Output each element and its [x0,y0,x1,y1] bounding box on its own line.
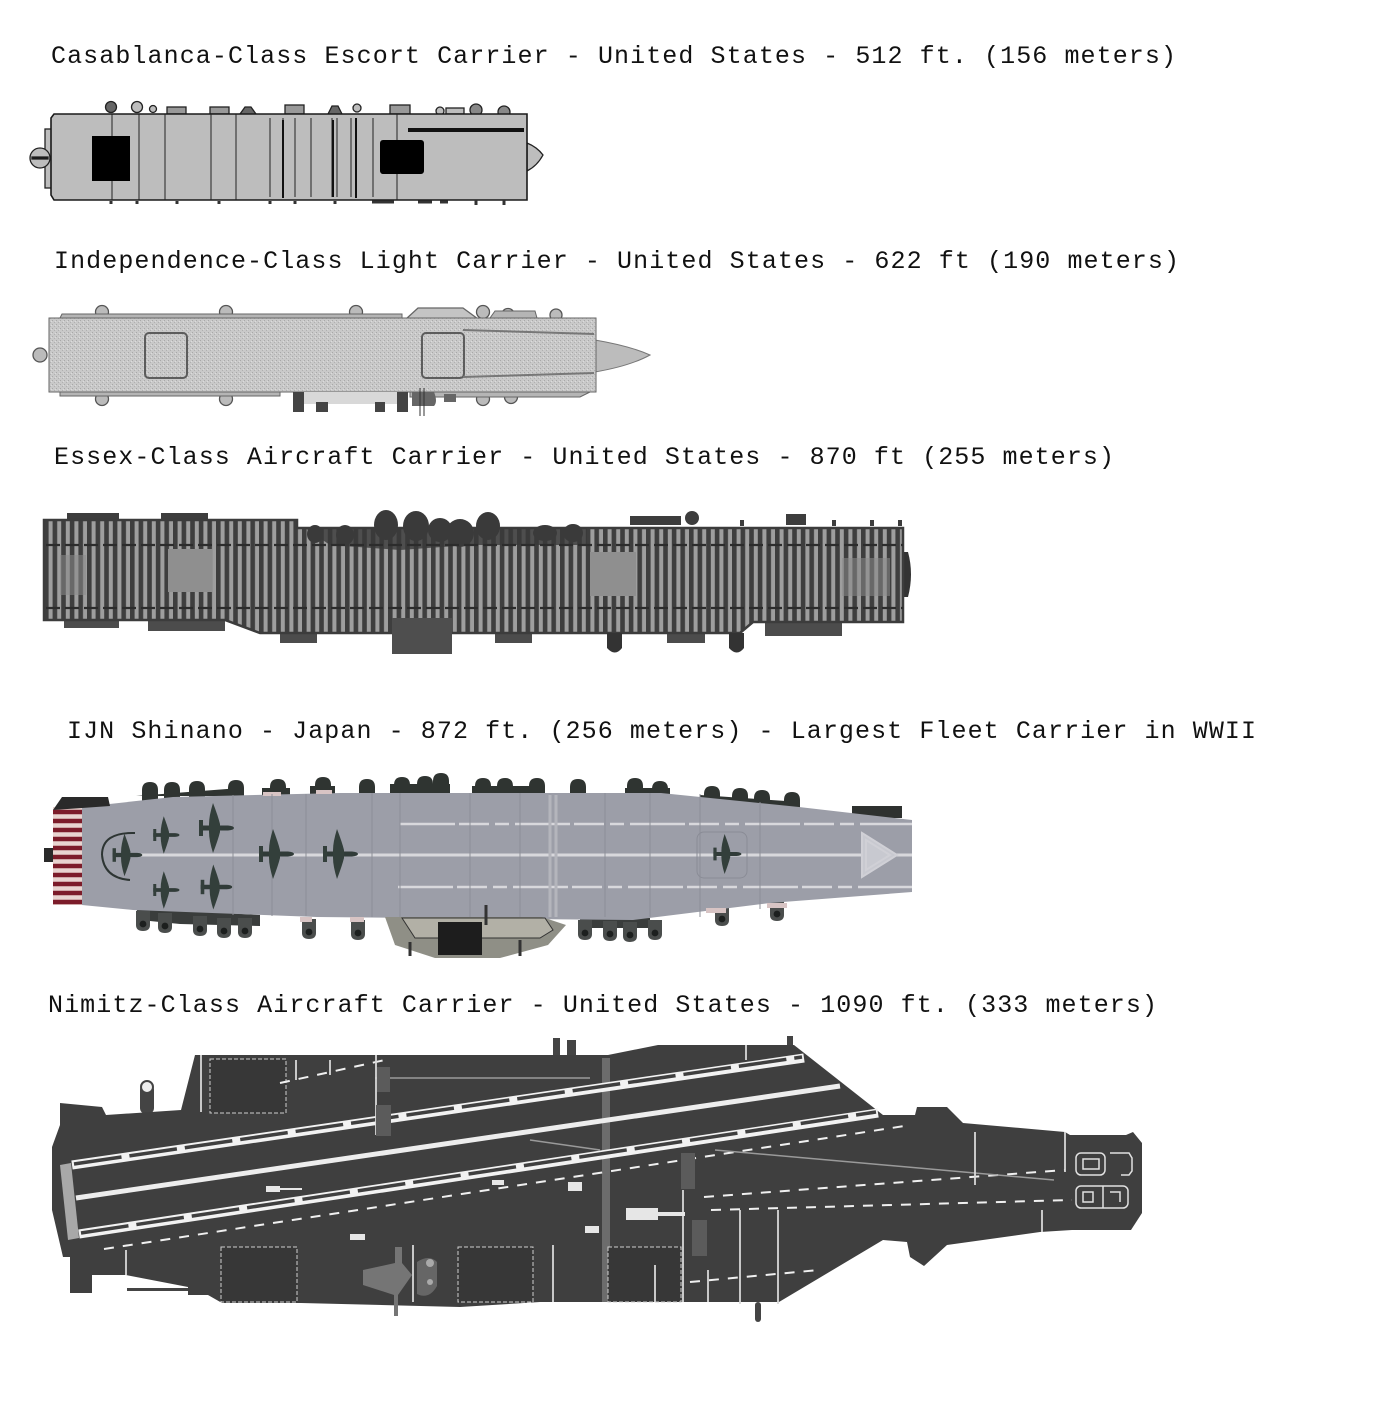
flight deck [49,318,596,392]
thin guide lines [375,1078,1054,1180]
deck parked equipment [266,1180,685,1240]
title: Casablanca-Class: Casablanca-Class Escort Carrier - United States - 512 ft. (156 meters) [51,42,1176,71]
bottom sponsons [64,620,842,643]
ship: IJN Shinano [44,773,912,958]
end deck markings [60,555,890,596]
island [385,905,566,958]
elevator: aft [92,136,130,181]
top elevators [210,1059,286,1113]
ship: Independence-Class light carrier [33,306,650,416]
lower edge fittings [111,200,504,205]
deck markings [130,854,912,856]
gun tubs [33,306,562,406]
fore elevator stacks [376,1067,707,1256]
catwalks [60,311,590,397]
flight deck [82,793,912,920]
ship: Casablanca-Class escort carrier [30,102,543,205]
deck edge elevator [392,618,452,654]
sponson mounts [106,102,510,118]
taxi dashes [104,1060,1072,1282]
antenna and masts [127,1036,793,1322]
elevator outlines [102,833,135,880]
catapult track [408,128,524,132]
pink sponson tabs [263,790,787,922]
bottom elevators [221,1247,681,1302]
bottom gun mounts [136,901,784,942]
island [363,1247,437,1316]
island bridge bump [406,308,478,319]
stowed aircraft [113,803,741,910]
bow catapult markings [1076,1153,1132,1208]
bow [595,340,650,372]
stern stripes [53,807,82,905]
elevator: forward [380,140,424,174]
flight deck [51,114,527,200]
title: IJN Shinano: IJN Shinano - Japan - 872 ft. (256 meters) - Largest Fleet Carrier in WWII [67,717,1256,746]
ship: Nimitz-Class aircraft carrier [52,1036,1142,1322]
central band [602,1058,610,1302]
catapult tracks [463,330,594,377]
stern mount and bow [30,129,543,188]
elevator: forward [590,552,636,596]
title: Independence-Class: Independence-Class Light Carrier - United States - 622 ft (190 meters) [54,247,1179,276]
deck seams [233,793,760,917]
bottom turrets [607,633,744,652]
vertical deck lines [126,1045,1065,1304]
deck transverse dashes [46,545,903,608]
top sponsons [67,513,902,526]
title: Essex-Class: Essex-Class Aircraft Carrier - United States - 870 ft (255 meters) [54,443,1114,472]
bow round [903,552,911,597]
title: Nimitz-Class: Nimitz-Class Aircraft Carrier - United States - 1090 ft. (333 meters) [48,991,1157,1020]
stern tip [44,797,110,862]
top gun mounts [136,773,902,818]
flight deck [44,520,903,633]
ship: Essex-Class aircraft carrier [44,510,911,654]
island cluster [305,510,587,550]
sponsons [293,392,408,404]
elevator: forward [422,333,464,378]
deck edge tone [60,1163,79,1240]
hull [52,1045,1142,1307]
landing area lines [72,1057,878,1234]
elevator: aft [168,549,212,592]
elevator: aft [145,333,187,378]
island structure [412,392,456,406]
deck seams [112,114,397,200]
